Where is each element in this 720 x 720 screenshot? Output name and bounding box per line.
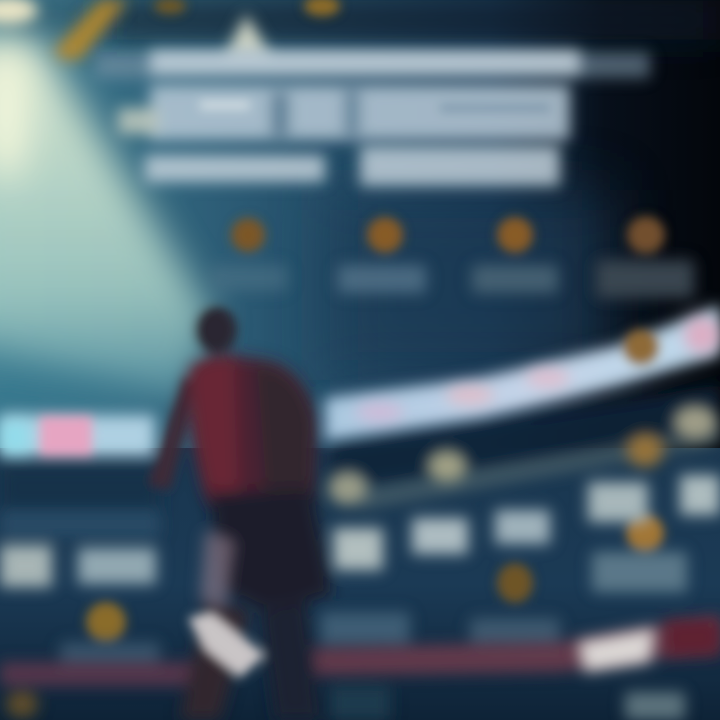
bottom row: [330, 685, 685, 720]
legs: [180, 600, 250, 720]
left arm: [148, 375, 198, 490]
torso: [190, 356, 315, 505]
icon: orange badge 2: [367, 217, 403, 253]
shoe: [188, 612, 265, 678]
lower panel: [0, 385, 720, 720]
lower badges: [6, 405, 717, 718]
red stripe: [0, 615, 720, 686]
icon: orange badge 1: [231, 218, 265, 252]
top gold accents: [54, 0, 340, 60]
feature labels: [212, 260, 694, 298]
light cards: [0, 475, 720, 592]
shorts: [210, 490, 332, 612]
athlete figure: [148, 306, 332, 720]
diagonal band: [0, 305, 720, 457]
lower labels: [60, 612, 560, 666]
icon: orange badge 4: [627, 216, 665, 254]
icon row: [231, 216, 665, 254]
title block: [95, 14, 650, 186]
icon: orange badge 3: [497, 217, 533, 253]
spotlight beam: [0, 0, 215, 420]
icon: band badge: [623, 329, 659, 365]
head: [195, 306, 237, 354]
